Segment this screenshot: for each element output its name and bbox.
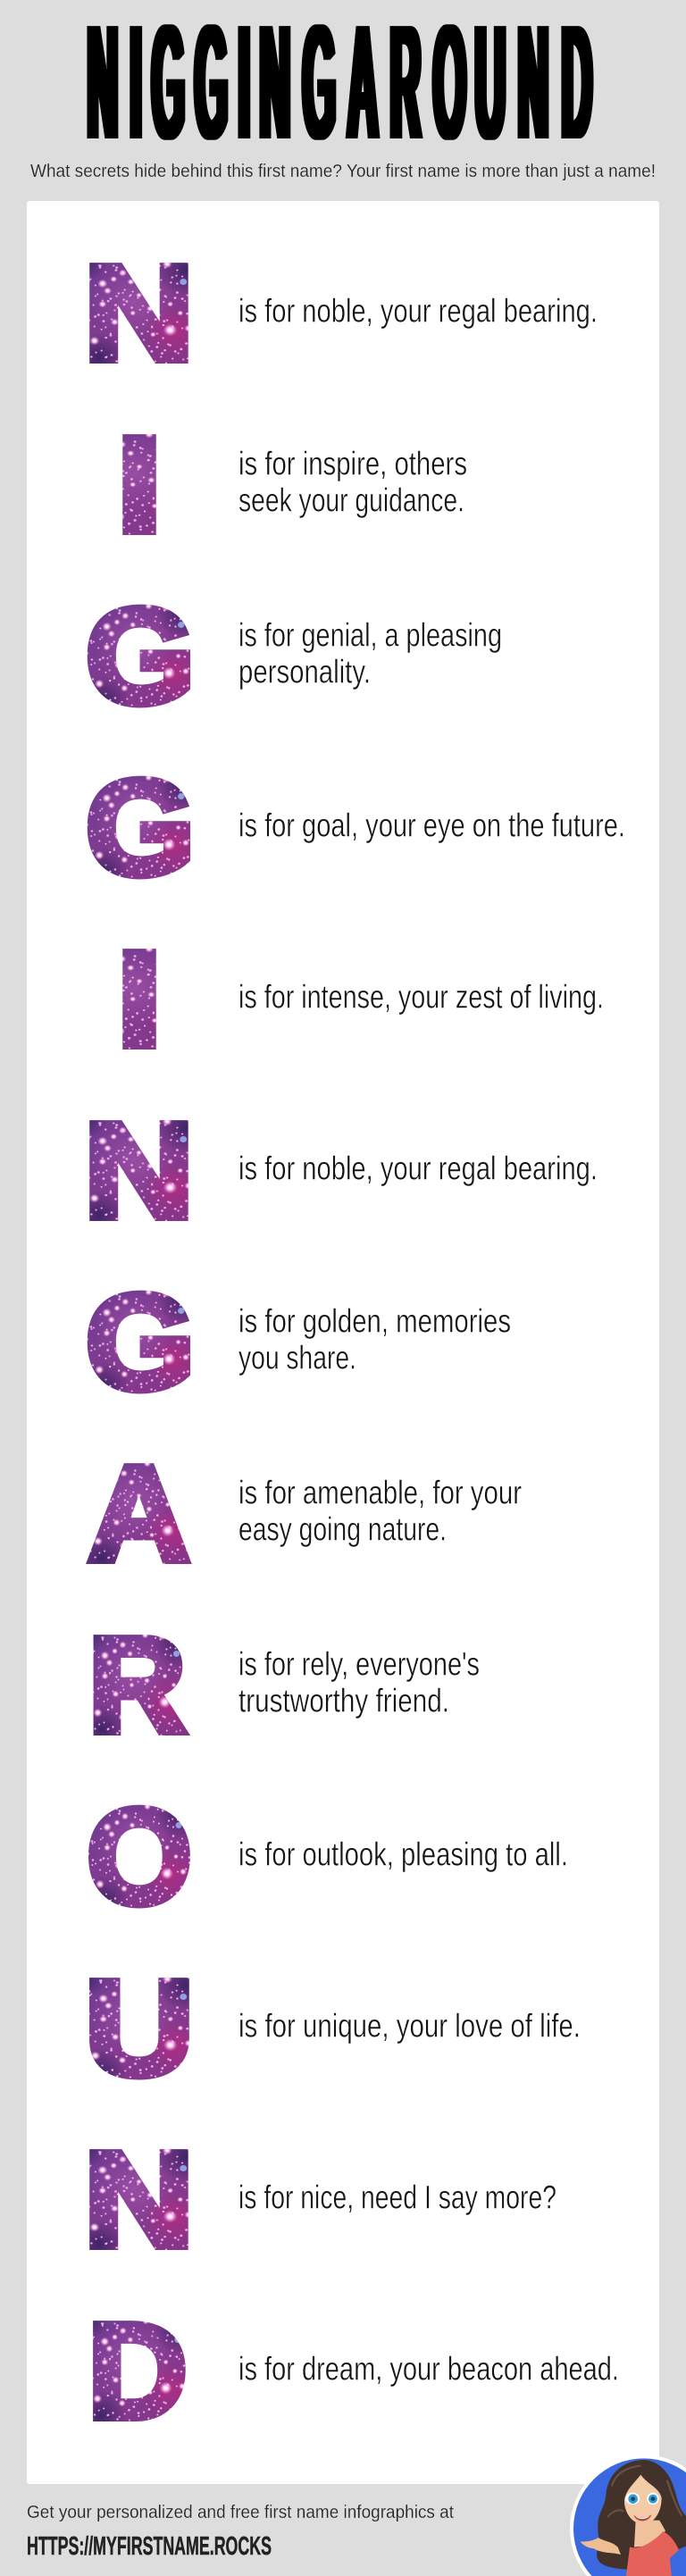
letter R: R (88, 1610, 186, 1760)
text: unique: is for unique, your love of life. (238, 2008, 581, 2044)
footer text: Get your personalized and free first name infographics at (27, 2503, 454, 2522)
text: rely second line: trustworthy friend. (238, 1683, 449, 1719)
letter D: D (88, 2296, 188, 2446)
letter N: N (84, 2125, 194, 2275)
row: N nice (84, 2125, 556, 2275)
text: outlook: is for outlook, pleasing to all. (238, 1836, 568, 1872)
text: noble: is for noble, your regal bearing. (238, 1150, 598, 1186)
subtitle: What secrets hide behind this first name? Your first name is more than just a name! (30, 162, 656, 181)
letter U: U (85, 1953, 194, 2103)
text: nice: is for nice, need I say more? (238, 2179, 556, 2215)
row: A amenable (88, 1438, 522, 1589)
letter N: N (84, 238, 194, 389)
row: G genial (86, 581, 502, 732)
row: N noble (84, 238, 598, 389)
text: amenable second line: easy going nature. (238, 1511, 447, 1547)
letter I: I (116, 409, 163, 560)
letter A: A (88, 1438, 189, 1589)
letter I: I (116, 924, 163, 1075)
letter G: G (86, 581, 195, 732)
letter G: G (86, 1267, 195, 1418)
letter N: N (84, 1096, 194, 1246)
text: noble: is for noble, your regal bearing. (238, 293, 598, 329)
text: golden: is for golden, memories (238, 1302, 511, 1340)
row: G golden (86, 1267, 511, 1418)
footer url: HTTPS://MYFIRSTNAME.ROCKS (27, 2532, 272, 2561)
row: I inspire (116, 409, 467, 560)
text: golden second line: you share. (238, 1340, 356, 1376)
letter O: O (87, 1781, 192, 1931)
row: U unique (85, 1953, 581, 2103)
row: I intense (116, 924, 604, 1075)
text: amenable: is for amenable, for your (238, 1474, 522, 1511)
text: inspire second line: seek your guidance. (238, 482, 464, 518)
row: N noble (84, 1096, 598, 1246)
row: O outlook (87, 1781, 568, 1931)
row: R rely (88, 1610, 480, 1760)
text: genial second line: personality. (238, 654, 371, 690)
row: D dream (88, 2296, 619, 2446)
text: inspire: is for inspire, others (238, 445, 467, 482)
row: G goal (86, 752, 625, 903)
icon: avatar (570, 2455, 686, 2576)
text: rely: is for rely, everyone's (238, 1645, 480, 1683)
letter G: G (86, 752, 195, 903)
text: genial: is for genial, a pleasing (238, 616, 502, 654)
